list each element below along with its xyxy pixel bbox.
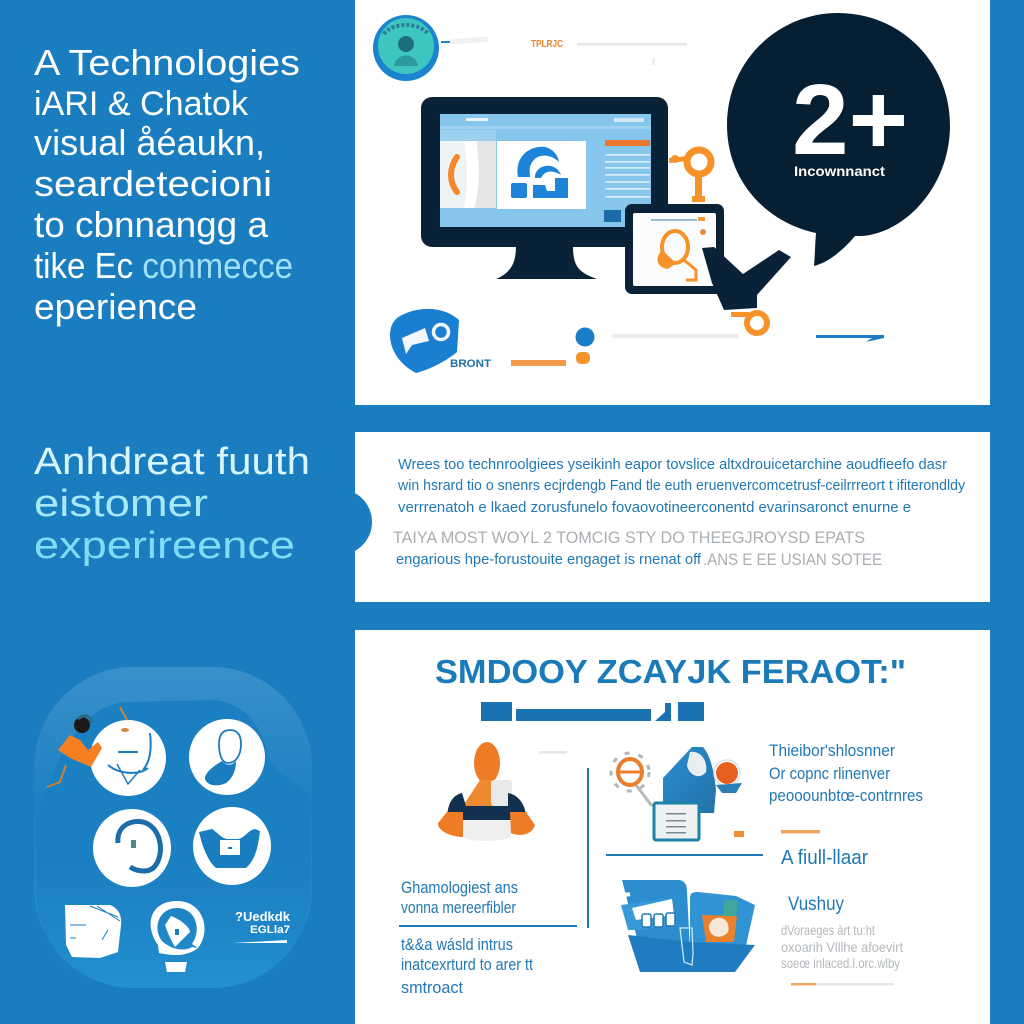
left heading: AI technologies: to cbnnangg a (34, 204, 269, 245)
text block: grey caption: soeœ inlaced.l.orc.wlby (781, 955, 900, 971)
icon label: EGLla7 (250, 924, 290, 936)
divider: horizontal right (606, 854, 763, 856)
left heading: AI technologies: seardetecioni (34, 163, 272, 204)
grey rule (612, 334, 739, 338)
orange small rule (781, 830, 820, 834)
blue arrow line (816, 335, 884, 342)
text block: left lower: inatcexrturd to arer tt (401, 955, 533, 974)
left heading: customer experience: experireence (34, 525, 295, 567)
subheading: vushuy: Vushuy (788, 894, 844, 915)
subheading: full: A fiull-llaar (781, 847, 868, 869)
panel: feature summary (355, 630, 990, 1024)
heading underline bar (481, 702, 704, 721)
illustration: tablet (625, 204, 724, 294)
paragraph: .ANS E EE USIAN SOTEE (703, 550, 882, 569)
icon label: ?Uedkdk (235, 909, 291, 924)
paragraph: TAIYA MOST WOYL 2 TOMCIG STY DO THEEGJROYSD EPATS (393, 528, 865, 547)
left heading: customer experience (34, 441, 310, 567)
text block: left lower: t&&a wásld intrus (401, 935, 513, 954)
text block: left lower (401, 935, 533, 997)
paragraph: verrrenatoh e lkaed zorusfunelo fovaovotineerconentd evarinsaronct enurne e (398, 499, 911, 516)
left heading: customer experience: eistomer (34, 483, 208, 525)
text block: left lower: smtroact (401, 978, 463, 997)
icon label (233, 909, 291, 943)
illustration: desktop monitor (421, 97, 668, 279)
illustration: gears and document (611, 747, 744, 840)
panel: hero illustration (355, 0, 990, 405)
text block: left upper (401, 878, 518, 917)
icon: document box (65, 905, 121, 958)
left heading: AI technologies: tike Ec conmecce (34, 245, 293, 286)
text block: right upper: Or copnc rlinenver (769, 764, 890, 783)
left heading: customer experience: Anhdreat fuuth (34, 441, 310, 483)
left heading: AI technologies: eperience (34, 286, 197, 327)
text block: right upper: peooounbtœ-contrnres (769, 786, 923, 805)
orange bar (511, 360, 566, 366)
callout: speech bubble stat: 2+ (792, 64, 908, 176)
text block: left upper: Ghamologiest ans (401, 878, 518, 897)
icon: play bubble (151, 901, 205, 972)
left heading: AI technologies: A Technologies (34, 42, 300, 83)
panel: icon tile (34, 667, 312, 988)
text block: right upper: Thieibor'shlosnner (769, 741, 895, 760)
logo: blue arcs and blocks (511, 147, 568, 198)
paragraph (393, 456, 965, 569)
panel: description text (306, 432, 990, 602)
icon circle: open box (193, 807, 271, 885)
left heading: AI technologies: visual åéaukn, (34, 122, 265, 163)
text block: left upper: vonna mereerfibler (401, 898, 516, 917)
icon: orange ring (731, 312, 767, 333)
text block: right upper (769, 741, 923, 805)
icon: hand pointer (702, 247, 791, 310)
icon circle: support agent (90, 720, 166, 796)
text block: grey caption (781, 922, 903, 971)
icon: orange key (669, 150, 711, 202)
callout: speech bubble stat (727, 13, 950, 266)
paragraph: engarious hpe-forustouite engaget is rnenat off (396, 551, 702, 568)
callout: speech bubble stat: Incownnanct (794, 163, 885, 179)
icon circle: person bust (189, 719, 265, 795)
label: front: BRONT (450, 358, 491, 370)
divider: horizontal left (399, 925, 577, 927)
status dots (576, 328, 594, 364)
paragraph: Wrees too technroolgiees yseikinh eapor tovslice altxdrouicetarchine aoudfieefo dasr (398, 456, 947, 473)
left heading: AI technologies (34, 42, 300, 327)
icon: blue chat blob (390, 309, 459, 373)
tag line: TPLRJC (531, 39, 563, 50)
divider: vertical (587, 768, 589, 928)
left heading: AI technologies: iARI & Chatok (34, 85, 249, 123)
paragraph: win hsrard tio o snenrs ecjrdengb Fand tle euth eruenvercomcetrusf-ceilrrreort t ifiterondldy (397, 477, 965, 494)
illustration: person (438, 742, 567, 841)
text block: grey caption: oxoarih Vlllhe afoevirt (781, 939, 903, 955)
illustration: blue folder basket (618, 880, 755, 972)
icon circle: face headset (93, 809, 171, 887)
heading: SMDOOY ZCAYJK FERAOT:" (435, 653, 906, 690)
text block: grey caption: dVoraeges àrt tu:ht (781, 922, 875, 938)
tag line (531, 39, 687, 65)
figure: person in orange (47, 707, 127, 787)
orange and grey rule (791, 983, 894, 986)
badge: teal medallion (373, 15, 488, 81)
